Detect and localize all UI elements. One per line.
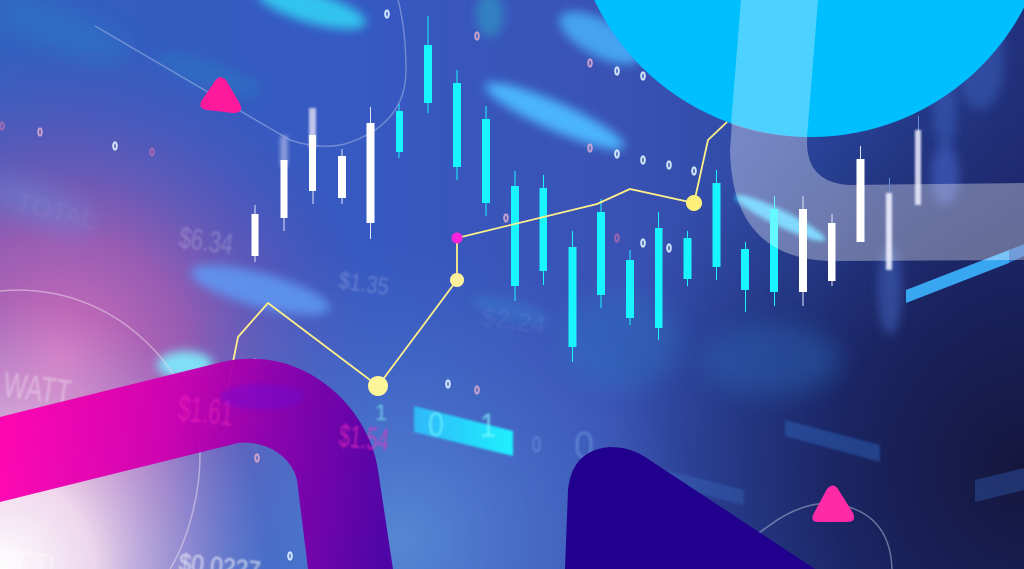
thin arc: lower-right curve (708, 503, 892, 569)
background: faded price labels: 0 (532, 432, 541, 457)
marker: large yellow point (368, 376, 388, 396)
thin arc: lower-left circle (0, 290, 200, 569)
yellow trend line (226, 122, 727, 397)
dark blue rounded triangle (565, 447, 815, 569)
white translucent rounded band (730, 0, 1024, 261)
candlestick chart: white candles, right (799, 116, 921, 306)
background: faded price labels: 0 (574, 425, 594, 467)
background: faded price labels: TOTAL (14, 187, 100, 236)
background: faded price labels: $1.35 (337, 267, 390, 301)
large cyan circle (571, 0, 1024, 137)
labels seen through band (176, 387, 391, 458)
candlestick chart: white candles (252, 107, 374, 262)
background: faded price labels: 0 (428, 406, 444, 444)
background: faded price labels: WATT (1, 363, 74, 413)
icon: pink triangle upper (200, 77, 241, 113)
background: faded price labels (0, 187, 594, 569)
candlestick chart: cyan candles (396, 16, 778, 362)
background: faded price labels: $6.34 (177, 221, 235, 261)
marker: right yellow point (686, 195, 702, 211)
icon: pink triangle lower (812, 486, 854, 522)
labels seen through band: $1.54 (337, 417, 391, 458)
background: blue accent bars (414, 244, 1024, 505)
background: small ring markers (0, 10, 696, 560)
background: blurred light streaks (0, 0, 1004, 395)
marker: magenta point (452, 232, 462, 244)
light strip across circle (731, 0, 818, 137)
blue blur in band (220, 384, 304, 410)
background: faded price labels: 1 (375, 400, 387, 425)
labels seen through band: $1.61 (176, 387, 235, 434)
background: faded price labels: 1 (480, 407, 496, 445)
background: faded price labels: $2.24 (479, 301, 548, 340)
marker: mid yellow point (450, 273, 464, 287)
magenta-to-purple rounded band (0, 359, 393, 569)
thin arc: upper curve (95, 0, 406, 146)
